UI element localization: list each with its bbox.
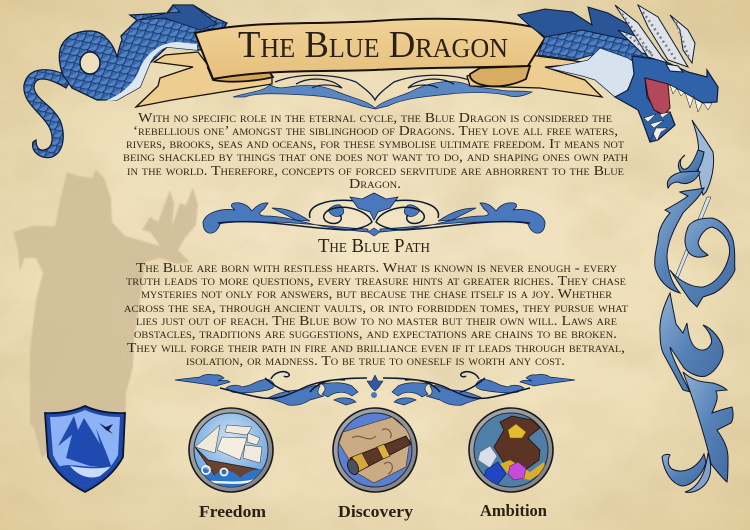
white horn crest [615, 5, 695, 67]
flourish leaves [233, 82, 532, 109]
left ribbon tail [136, 52, 272, 107]
lower leaf [683, 372, 733, 482]
lower drop [368, 228, 380, 236]
second paragraph: isolation, or madness. To be true to oneself is worth any cost. [186, 353, 565, 368]
medallion: ambition treasure [469, 408, 553, 492]
crest stripes [622, 12, 689, 60]
right ribbon tail [467, 55, 602, 97]
gold coins [508, 424, 526, 438]
pale stem [675, 197, 711, 278]
second paragraph: lies just out of reach. The Blue bow to no master but their own will. Laws are [136, 313, 618, 328]
left half leaves [175, 372, 367, 405]
shield ship [58, 416, 112, 487]
right fold [470, 66, 530, 86]
coiled body [59, 5, 227, 100]
title: The Blue Dragon [238, 24, 508, 66]
hull [195, 447, 262, 480]
first paragraph: rivers, brooks, seas and oceans, for these symbolise ultimate freedom. It means not [126, 136, 625, 151]
neck scales [538, 30, 652, 77]
dorsal fins [137, 5, 217, 30]
upper wing [655, 188, 704, 293]
medallion: discovery spyglass [333, 408, 417, 492]
open mouth [645, 78, 670, 115]
right half mirror [383, 372, 575, 405]
right vine flourish [655, 120, 735, 492]
side leaf [667, 171, 700, 188]
sapphire [484, 462, 506, 486]
spiral scroll [670, 218, 735, 307]
bottom tip [685, 453, 711, 492]
label: freedom: Freedom [199, 502, 266, 521]
label: ambition: Ambition [480, 501, 548, 520]
first paragraph: being shackled by things that one does not want to do, and shaping ones own path [123, 149, 629, 164]
second paragraph: across the sea, through ancient vaults, or into forbidden tomes, they pursue what [124, 300, 629, 315]
lower crescent [660, 293, 723, 392]
banner ribbon [136, 19, 602, 107]
dragon head [518, 5, 718, 142]
sails [195, 425, 220, 453]
parchment map [339, 417, 411, 483]
medallion: freedom ship [189, 408, 273, 495]
left dragon tail [24, 5, 227, 158]
second paragraph: They will forge their path in fire and brilliance even if it leads through betrayal, [127, 340, 625, 355]
centre fleuron [367, 375, 383, 391]
middle divider ornament [203, 193, 545, 236]
left half leaves [203, 200, 372, 233]
first paragraph: With no specific role in the eternal cycle, the Blue Dragon is considered the [138, 110, 613, 125]
centre bead [371, 392, 377, 398]
silhouette: shadow figure with trident [13, 170, 198, 458]
pouch [494, 416, 540, 470]
waves [199, 468, 264, 487]
first paragraph: Dragon. [349, 176, 401, 191]
small curl [678, 150, 704, 176]
head and jaw [615, 56, 718, 142]
left fold [208, 68, 273, 82]
main banner [195, 19, 545, 79]
shield emblem [45, 406, 125, 492]
top crown leaf [350, 193, 398, 220]
bottom curl [662, 454, 706, 486]
coil hole [80, 52, 100, 74]
pale belly [105, 42, 197, 101]
back fins [518, 7, 650, 56]
flourish scrolls [275, 75, 475, 100]
second paragraph: obstacles, traditions are suggestions, and expectations are chains to be broken. [134, 326, 617, 341]
top spine leaf [692, 120, 714, 195]
bottom divider ornament [175, 372, 575, 405]
second paragraph: truth leads to more questions, every treasure hints at greater riches. They chase [126, 273, 627, 288]
second paragraph: mysteries not only for answers, but because the chase itself is a joy. Whether [141, 286, 612, 301]
second paragraph [124, 260, 629, 368]
teeth [644, 85, 712, 142]
spyglass [350, 436, 411, 472]
first paragraph: in the world. Therefore, concepts of forced servitude are abhorrent to the Blue [127, 163, 625, 178]
heading: the blue path: The Blue Path [318, 235, 430, 257]
first paragraph [123, 110, 629, 191]
shield bird [99, 423, 113, 434]
label: discovery: Discovery [338, 502, 414, 521]
right half mirror [376, 200, 545, 233]
diamond [478, 446, 497, 468]
first paragraph: ‘rebellious one’ amongst the siblinghood of Dragons. They love all free waters, [133, 123, 618, 138]
tail hook [24, 70, 72, 158]
eye [666, 64, 683, 72]
top flourish under banner [233, 75, 532, 109]
pale throat [548, 48, 640, 97]
second paragraph: The Blue are born with restless hearts. What is known is never enough - every [136, 260, 618, 275]
amethyst [508, 462, 526, 480]
